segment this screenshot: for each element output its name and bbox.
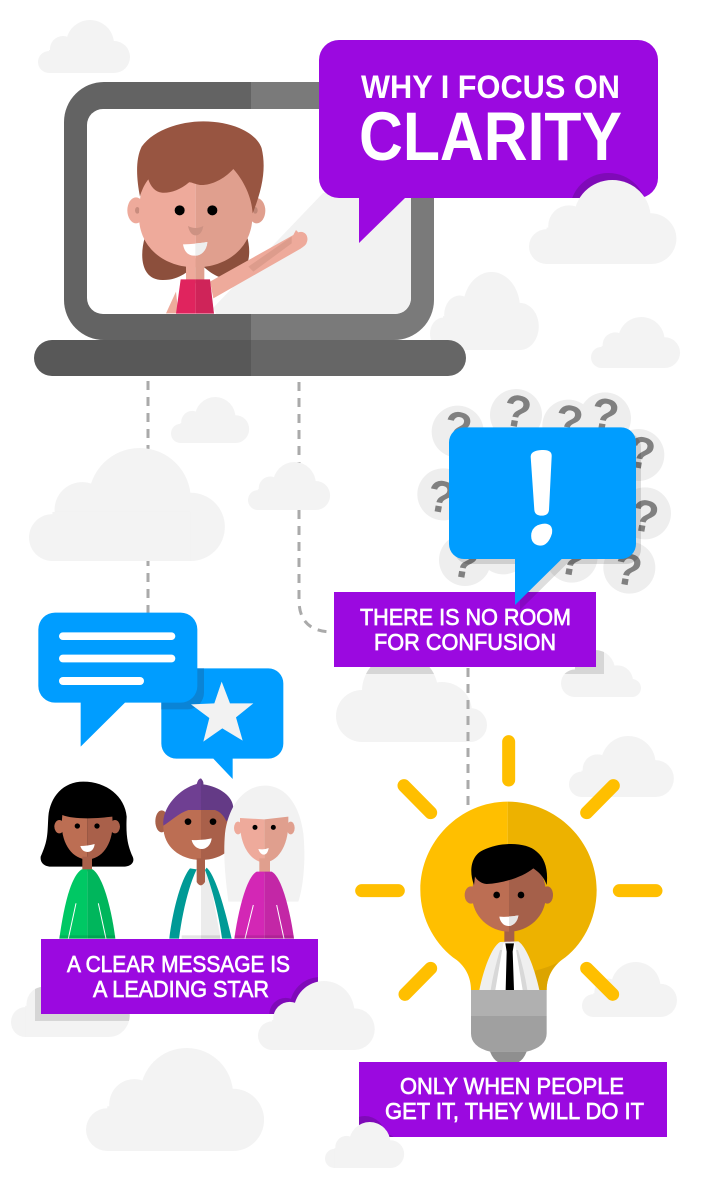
question marks cluster: ? xyxy=(623,425,659,480)
laptop xyxy=(34,82,466,376)
question marks cluster: ? xyxy=(587,387,623,442)
bulb screw base xyxy=(471,990,547,1062)
blue bubble xyxy=(449,427,636,605)
three people xyxy=(41,778,304,939)
label: only when people get it they will do it: ONLY WHEN PEOPLE xyxy=(400,1073,624,1099)
question marks cluster: ? xyxy=(499,384,535,439)
exclamation mark icon xyxy=(531,450,552,546)
question marks cluster: ? xyxy=(440,400,476,455)
title text line 2: CLARITY xyxy=(359,98,622,175)
bubble shape xyxy=(319,40,658,243)
exclamation speech bubble xyxy=(449,427,641,610)
label: a clear message is a leading star: A CLEAR MESSAGE IS xyxy=(67,951,290,977)
star speech bubble xyxy=(161,668,284,779)
connector: dashed line from laptop to confusion label xyxy=(299,382,333,632)
cloud shadow on bubble xyxy=(572,173,644,198)
woman waving on screen xyxy=(127,121,307,314)
laptop lid xyxy=(64,82,434,340)
person: man with purple hair xyxy=(155,778,238,939)
question marks cluster: ? xyxy=(610,542,646,597)
cloud overlapping title bubble xyxy=(529,180,676,264)
question marks cluster: ? xyxy=(554,532,590,587)
cloud overlapping bulb label xyxy=(325,1122,404,1168)
bulb glass xyxy=(420,802,597,990)
box shadows falling on clouds xyxy=(11,650,641,1037)
light bulb with rays and man xyxy=(362,742,656,1062)
cloud overlapping star label xyxy=(258,981,375,1050)
connector: dashed line from laptop to chat bubbles xyxy=(146,381,150,613)
light rays xyxy=(362,742,656,994)
label: there is no room for confusion xyxy=(334,592,596,667)
question marks cluster xyxy=(417,384,671,597)
label: a clear message is a leading star: A LEADING STAR xyxy=(93,976,269,1002)
question marks cluster: ? xyxy=(423,469,459,524)
connector: dashed line from confusion label to light bulb xyxy=(466,668,470,810)
title text line 1: WHY I FOCUS ON xyxy=(361,69,620,105)
bubble drop shadow xyxy=(454,432,641,610)
text lines speech bubble xyxy=(38,613,197,747)
label: a clear message is a leading star xyxy=(41,939,318,1014)
chat bubbles xyxy=(38,613,283,779)
label: there is no room for confusion: THERE IS NO ROOM xyxy=(360,604,571,630)
question marks cluster: ? xyxy=(447,535,483,590)
question marks cluster: ? xyxy=(551,394,587,449)
person: woman with black hair xyxy=(41,782,133,939)
question marks cluster: ? xyxy=(627,489,663,544)
title speech bubble xyxy=(319,40,658,243)
label: there is no room for confusion: FOR CONFUSION xyxy=(374,629,556,655)
man in bulb xyxy=(465,844,553,990)
label: only when people get it they will do it: GET IT, THEY WILL DO IT xyxy=(385,1098,644,1124)
label: only when people get it they will do it xyxy=(359,1062,667,1137)
person: woman with white hair xyxy=(224,786,304,939)
laptop screen xyxy=(87,109,411,314)
laptop base xyxy=(34,340,466,376)
